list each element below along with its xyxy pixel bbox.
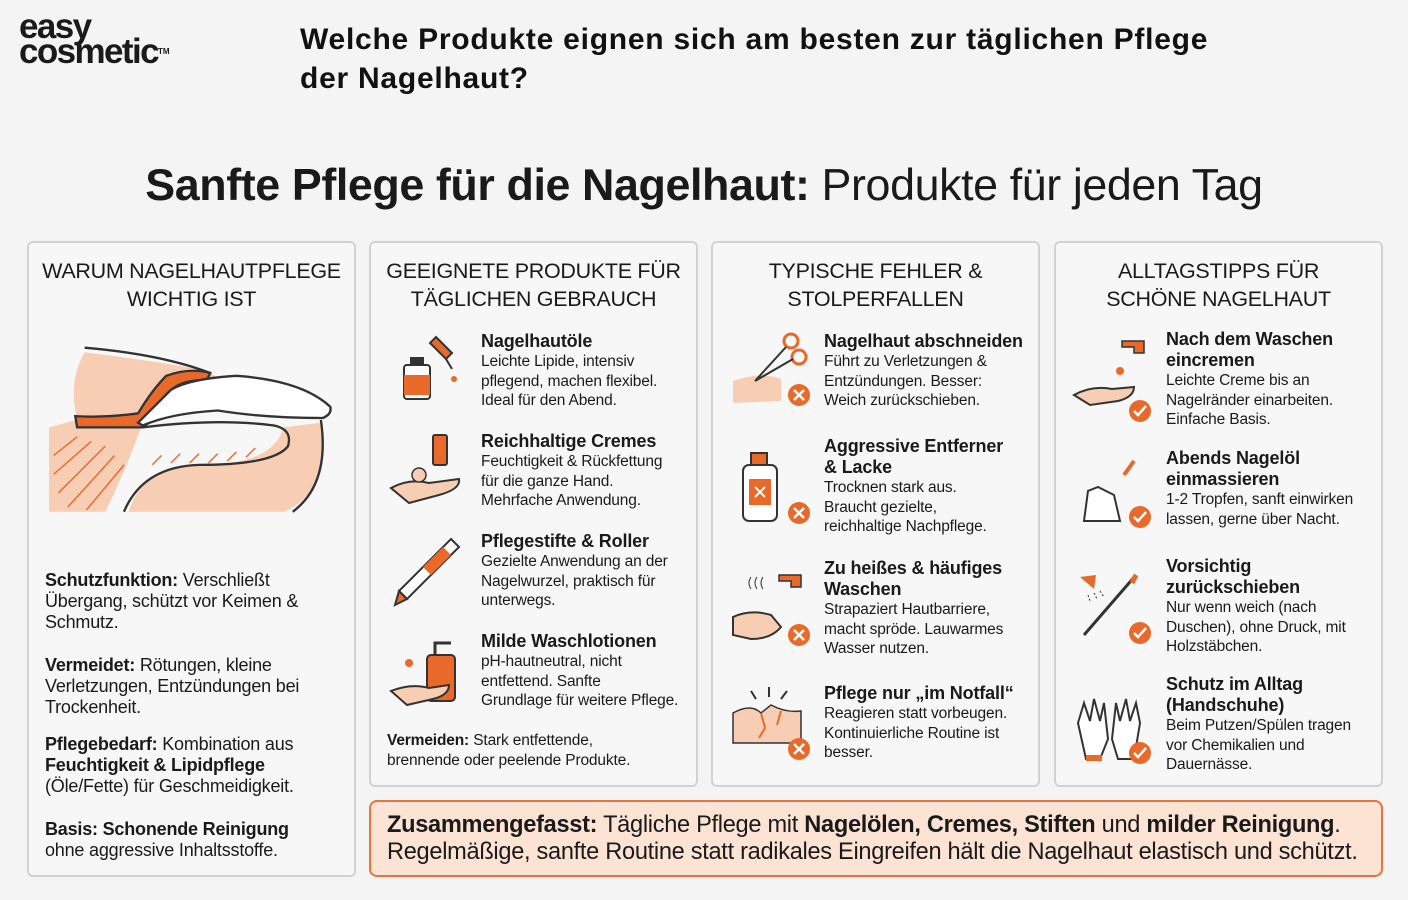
- text: nagelöl: einmassieren: [1166, 469, 1279, 489]
- callout: summary: [369, 800, 1383, 877]
- text: zurückschieben: Vorsichtig: [1166, 556, 1251, 576]
- text: nagelhautöle: Nagelhautöle: [481, 331, 592, 351]
- text: basis: Basis: Schonende Reinigung: [45, 819, 289, 839]
- text: eincremen: Leichte Creme bis an: [1166, 372, 1309, 389]
- heading: TYPISCHE FEHLER &: [769, 259, 982, 283]
- callout: summary: Regelmäßige, sanfte Routine statt radikales Eingreifen hält die Nagelhaut elastisch und schützt.: [387, 839, 1358, 865]
- panel: produkte: [369, 241, 698, 787]
- icon: scissors: [733, 332, 810, 406]
- text: pflegestifte: Gezielte Anwendung an der: [481, 553, 668, 570]
- text: abschneiden: Führt zu Verletzungen &: [824, 353, 987, 370]
- text: basis: [45, 819, 289, 860]
- text: nagelöl: Abends Nagelöl: [1166, 448, 1300, 468]
- text: abschneiden: Nagelhaut abschneiden: [824, 331, 1023, 351]
- text: entferner: reichhaltige Nachpflege.: [824, 518, 987, 535]
- text: schutzfunktion: Schutzfunktion: Verschließt: [45, 570, 270, 590]
- text: pflegestifte: [481, 531, 668, 609]
- text: nagelöl: [1166, 448, 1353, 528]
- text: cremes: Feuchtigkeit & Rückfettung: [481, 453, 662, 470]
- text: entferner: Trocknen stark aus.: [824, 479, 957, 496]
- text: cremes: Mehrfache Anwendung.: [481, 492, 641, 509]
- text: abschneiden: [824, 331, 1023, 409]
- text: abschneiden: Weich zurückschieben.: [824, 392, 980, 409]
- panel: warum: [27, 241, 356, 877]
- text: schutzfunktion: Übergang, schützt vor Keimen &: [45, 591, 298, 611]
- heading: [386, 259, 681, 311]
- text: zurückschieben: zurückschieben: [1166, 577, 1300, 597]
- heading: ALLTAGSTIPPS FÜR: [1118, 259, 1319, 283]
- text: nagelhautöle: pflegend, machen flexibel.: [481, 372, 657, 390]
- text: schutz: Beim Putzen/Spülen tragen: [1166, 717, 1351, 734]
- text: eincremen: Einfache Basis.: [1166, 411, 1271, 428]
- text: notfall: Kontinuierliche Routine ist: [824, 724, 999, 742]
- heading: WARUM NAGELHAUTPFLEGE: [42, 259, 341, 283]
- text: vermeidet: Trockenheit.: [45, 697, 141, 717]
- icon: pump bottle: [389, 642, 456, 706]
- icon: shower stick: [1080, 574, 1151, 644]
- text: pflegebedarf: Feuchtigkeit & Lipidpflege: [45, 755, 265, 775]
- text: schutz: Schutz im Alltag: [1166, 674, 1303, 694]
- heading: [769, 259, 982, 311]
- text: vermeiden: [387, 732, 630, 768]
- text: schutz: vor Chemikalien und: [1166, 736, 1304, 754]
- text: pflegestifte: Nagelwurzel, praktisch für: [481, 572, 655, 590]
- text: waschlotionen: Grundlage für weitere Pflege.: [481, 692, 678, 709]
- title: Sanfte Pflege für die Nagelhaut: Produkte für jeden Tag: [145, 160, 1263, 210]
- text: vermeidet: Vermeidet: Rötungen, kleine: [45, 655, 272, 675]
- icon: oil bottle: [403, 336, 457, 400]
- heading: TÄGLICHEN GEBRAUCH: [411, 287, 656, 311]
- text: notfall: besser.: [824, 744, 873, 761]
- header question: Welche Produkte eignen sich am besten zur täglichen Pflege: [300, 23, 1208, 56]
- text: nagelhautöle: Leichte Lipide, intensiv: [481, 353, 634, 370]
- heading: GEEIGNETE PRODUKTE FÜR: [386, 259, 681, 283]
- text: zurückschieben: [1166, 556, 1346, 655]
- heading: [1106, 259, 1331, 311]
- panel: fehler: [711, 241, 1040, 787]
- text: waschlotionen: [481, 631, 678, 709]
- text: zurückschieben: Holzstäbchen.: [1166, 638, 1262, 655]
- text: schutzfunktion: [45, 570, 298, 632]
- header question: [300, 23, 1208, 95]
- icon: moon oil: [1082, 460, 1151, 528]
- text: eincremen: [1166, 329, 1333, 428]
- text: notfall: [824, 683, 1014, 761]
- text: pflegestifte: unterwegs.: [481, 592, 555, 609]
- text: entferner: Braucht gezielte,: [824, 498, 937, 516]
- text: cremes: für die ganze Hand.: [481, 472, 613, 490]
- text: pflegebedarf: Pflegebedarf: Kombination aus: [45, 734, 293, 754]
- icon: hot water: [732, 574, 810, 646]
- text: waschen: Wasser nutzen.: [824, 640, 929, 657]
- callout: summary: Zusammengefasst: Tägliche Pflege mit Nagelölen, Cremes, Stiften und milder Reinigung.: [387, 812, 1341, 838]
- text: waschen: Zu heißes & häufiges: [824, 558, 1002, 578]
- text: entferner: & Lacke: [824, 457, 892, 477]
- text: schutz: [1166, 674, 1351, 773]
- text: entferner: Aggressive Entferner: [824, 436, 1003, 456]
- text: waschen: Strapaziert Hautbarriere,: [824, 601, 990, 618]
- text: vermeidet: [45, 655, 299, 717]
- icon: pen: [393, 538, 460, 607]
- text: vermeiden: brennende oder peelende Produkte.: [387, 752, 630, 768]
- icon: cream hand: [389, 434, 460, 504]
- text: schutz: (Handschuhe): [1166, 695, 1284, 715]
- icon: gloves: [1077, 698, 1151, 764]
- logo: [19, 7, 170, 71]
- text: waschlotionen: pH-hautneutral, nicht: [481, 653, 622, 670]
- text: zurückschieben: Nur wenn weich (nach: [1166, 599, 1316, 616]
- text: vermeidet: Verletzungen, Entzündungen bei: [45, 676, 299, 696]
- text: schutz: Dauernässe.: [1166, 756, 1252, 773]
- text: schutzfunktion: Schmutz.: [45, 612, 118, 632]
- text: entferner: [824, 436, 1003, 535]
- heading: SCHÖNE NAGELHAUT: [1106, 287, 1331, 311]
- text: nagelöl: 1-2 Tropfen, sanft einwirken: [1166, 491, 1353, 508]
- icon: cracked skin: [732, 687, 810, 760]
- heading: WICHTIG IST: [127, 287, 256, 311]
- text: eincremen: eincremen: [1166, 350, 1255, 370]
- text: waschlotionen: entfettend. Sanfte: [481, 672, 601, 690]
- text: zurückschieben: Duschen), ohne Druck, mit: [1166, 618, 1346, 636]
- text: vermeiden: Vermeiden: Stark entfettende,: [387, 732, 593, 749]
- logo: easy: [19, 7, 90, 46]
- header question: der Nagelhaut?: [300, 62, 529, 95]
- icon: remover bottle: [742, 452, 810, 524]
- heading: [42, 259, 341, 311]
- text: pflegebedarf: [45, 734, 294, 796]
- text: abschneiden: Entzündungen. Besser:: [824, 372, 982, 390]
- text: notfall: Reagieren statt vorbeugen.: [824, 705, 1007, 722]
- text: eincremen: Nagelränder einarbeiten.: [1166, 392, 1333, 408]
- text: notfall: Pflege nur „im Notfall“: [824, 683, 1014, 703]
- text: nagelhautöle: Ideal für den Abend.: [481, 392, 617, 409]
- logo: cosmeticTM: [19, 32, 170, 71]
- text: waschen: macht spröde. Lauwarmes: [824, 620, 1003, 638]
- text: nagelhautöle: [481, 331, 657, 409]
- icon: tap and cream: [1072, 340, 1151, 422]
- text: waschlotionen: Milde Waschlotionen: [481, 631, 656, 651]
- text: waschen: Waschen: [824, 579, 901, 599]
- text: pflegestifte: Pflegestifte & Roller: [481, 531, 649, 551]
- text: cremes: Reichhaltige Cremes: [481, 431, 656, 451]
- text: waschen: [824, 558, 1003, 657]
- text: basis: ohne aggressive Inhaltsstoffe.: [45, 840, 278, 860]
- illustration: nail cross-section: [49, 346, 332, 513]
- text: cremes: [481, 431, 662, 509]
- text: nagelöl: lassen, gerne über Nacht.: [1166, 510, 1340, 528]
- heading: STOLPERFALLEN: [787, 287, 964, 311]
- text: eincremen: Nach dem Waschen: [1166, 329, 1333, 349]
- panel: tipps: [1054, 241, 1383, 787]
- text: pflegebedarf: (Öle/Fette) für Geschmeidigkeit.: [45, 776, 294, 796]
